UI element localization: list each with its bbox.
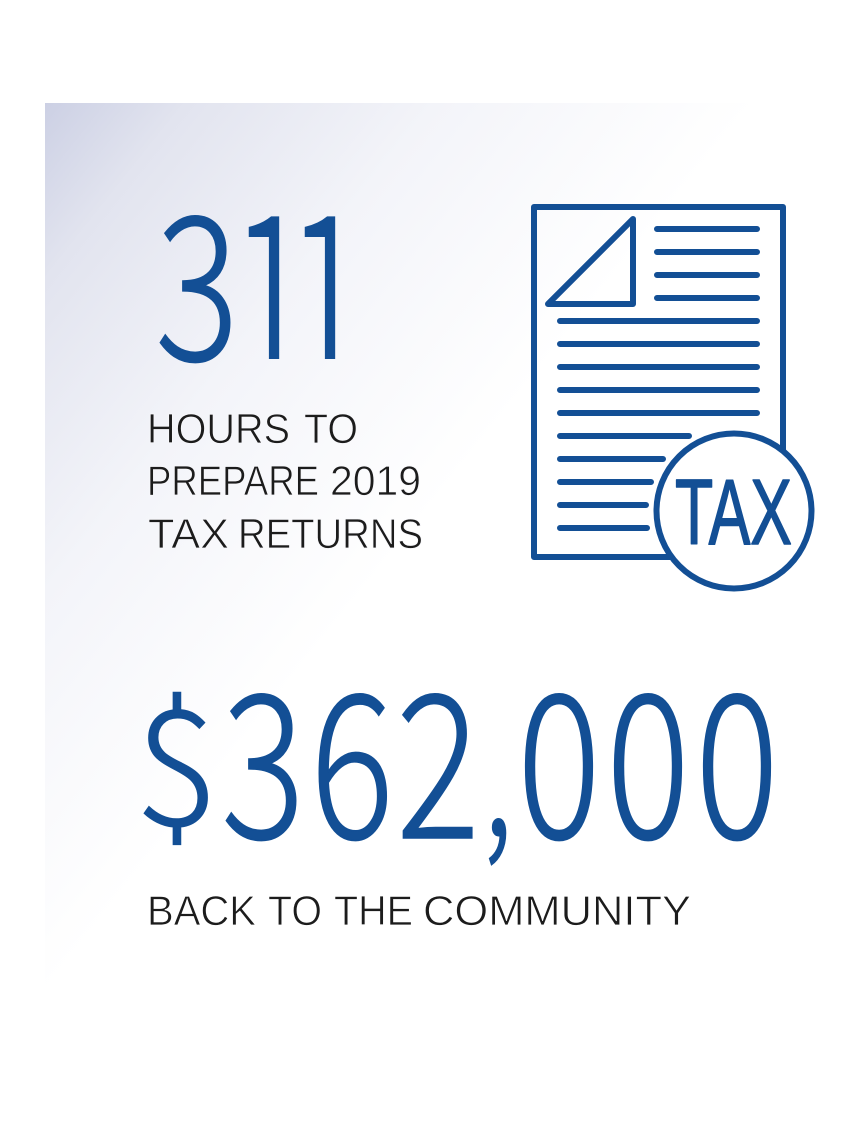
text block: hours to prepare 2019 tax returns — [147, 405, 423, 557]
statistic: 311: 1 — [229, 118, 313, 436]
icon: tax document — [534, 207, 812, 588]
text block: hours to prepare 2019 tax returns: PREPARE — [147, 457, 319, 504]
text block: back to the community: BACK — [147, 887, 256, 934]
page corner triangle — [548, 219, 633, 304]
tax badge: TAX — [675, 460, 792, 564]
text block: back to the community — [147, 887, 691, 934]
text block: back to the community: COMMUNITY — [423, 887, 691, 934]
text block: hours to prepare 2019 tax returns: HOURS — [147, 405, 290, 452]
text block: hours to prepare 2019 tax returns: RETURNS — [238, 510, 423, 557]
statistic: $362,000: 3 — [221, 606, 305, 896]
statistic: $362,000: 0 — [517, 606, 601, 896]
statistic: $362,000: 6 — [310, 606, 394, 896]
text block: back to the community: TO — [268, 887, 322, 934]
statistic: 311: 3 — [155, 128, 239, 418]
text block: hours to prepare 2019 tax returns: 2019 — [330, 457, 421, 504]
document outline — [534, 207, 783, 557]
statistic: $362,000: 0 — [606, 606, 690, 896]
statistic: 311 — [160, 215, 336, 364]
tax badge — [656, 434, 812, 588]
statistic: $362,000 — [134, 606, 779, 896]
text block: hours to prepare 2019 tax returns: TAX — [148, 510, 229, 557]
statistic: $362,000: $ — [134, 640, 218, 872]
text block: back to the community: THE — [334, 887, 413, 934]
panel: gradient background — [45, 103, 864, 1003]
statistic: $362,000: , — [483, 639, 513, 885]
text block: hours to prepare 2019 tax returns: TO — [304, 405, 358, 452]
statistic: 311: 1 — [285, 118, 369, 436]
text lines — [560, 229, 757, 528]
statistic: $362,000: 0 — [695, 606, 779, 896]
statistic: $362,000: 2 — [396, 606, 480, 896]
